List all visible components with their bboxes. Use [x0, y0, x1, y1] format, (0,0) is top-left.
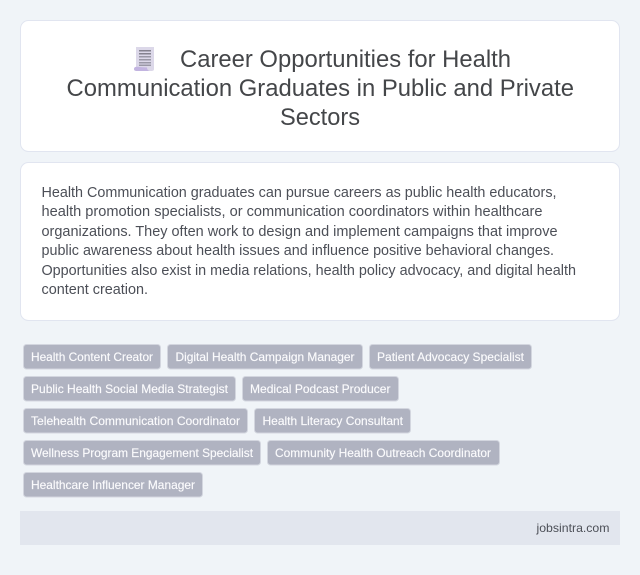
heading: title: Communication Graduates in Public and Private — [66, 75, 574, 102]
tag: Community Health Outreach Coordinator — [268, 440, 500, 465]
panel: title card — [20, 20, 620, 152]
tag: Patient Advocacy Specialist: Patient Advocacy Specialist — [377, 350, 525, 364]
tag: Healthcare Influencer Manager: Healthcare Influencer Manager — [31, 478, 195, 492]
tag: Health Literacy Consultant — [254, 408, 410, 433]
tag: Digital Health Campaign Manager — [168, 344, 362, 369]
tag: Wellness Program Engagement Specialist: Wellness Program Engagement Specialist — [31, 446, 254, 460]
tag: Telehealth Communication Coordinator: Telehealth Communication Coordinator — [31, 414, 240, 428]
footer bar — [20, 511, 620, 545]
tag: Health Literacy Consultant: Health Literacy Consultant — [262, 414, 404, 428]
tag: Public Health Social Media Strategist: Public Health Social Media Strategist — [31, 382, 229, 396]
tag: Digital Health Campaign Manager: Digital Health Campaign Manager — [176, 350, 355, 364]
panel: description card — [20, 162, 620, 320]
text block: description: health promotion specialists, or communication coordinators within healthcare — [42, 204, 542, 220]
tag: Healthcare Influencer Manager — [24, 472, 202, 497]
tag: Health Content Creator — [24, 344, 160, 369]
tag: Public Health Social Media Strategist — [24, 376, 236, 401]
heading: title: Sectors — [280, 104, 360, 131]
tag: Medical Podcast Producer — [242, 376, 398, 401]
icon: receipt scroll — [134, 47, 154, 71]
tag: Wellness Program Engagement Specialist — [24, 440, 260, 465]
tag: Patient Advocacy Specialist — [370, 344, 532, 369]
text block: description: content creation. — [42, 282, 148, 298]
tag: Telehealth Communication Coordinator — [24, 408, 248, 433]
tag list: career roles — [24, 344, 532, 497]
heading: title — [66, 46, 574, 131]
heading: title: Career Opportunities for Health — [180, 46, 511, 73]
text block: description: Opportunities also exist in media relations, health policy advocacy, and digital health — [42, 263, 576, 279]
tag: Medical Podcast Producer: Medical Podcast Producer — [250, 382, 390, 396]
footer: source credit: jobsintra.com — [535, 521, 610, 535]
text block: description: Health Communication graduates can pursue careers as public health educators, — [42, 185, 556, 201]
text block: description — [42, 185, 576, 298]
text block: description: organizations. They often work to design and implement campaigns that improve — [42, 224, 558, 240]
tag: Community Health Outreach Coordinator: Community Health Outreach Coordinator — [275, 446, 491, 460]
tag: Health Content Creator: Health Content Creator — [31, 350, 153, 364]
text block: description: public awareness about health issues and influence positive behavioral changes. — [42, 243, 554, 259]
